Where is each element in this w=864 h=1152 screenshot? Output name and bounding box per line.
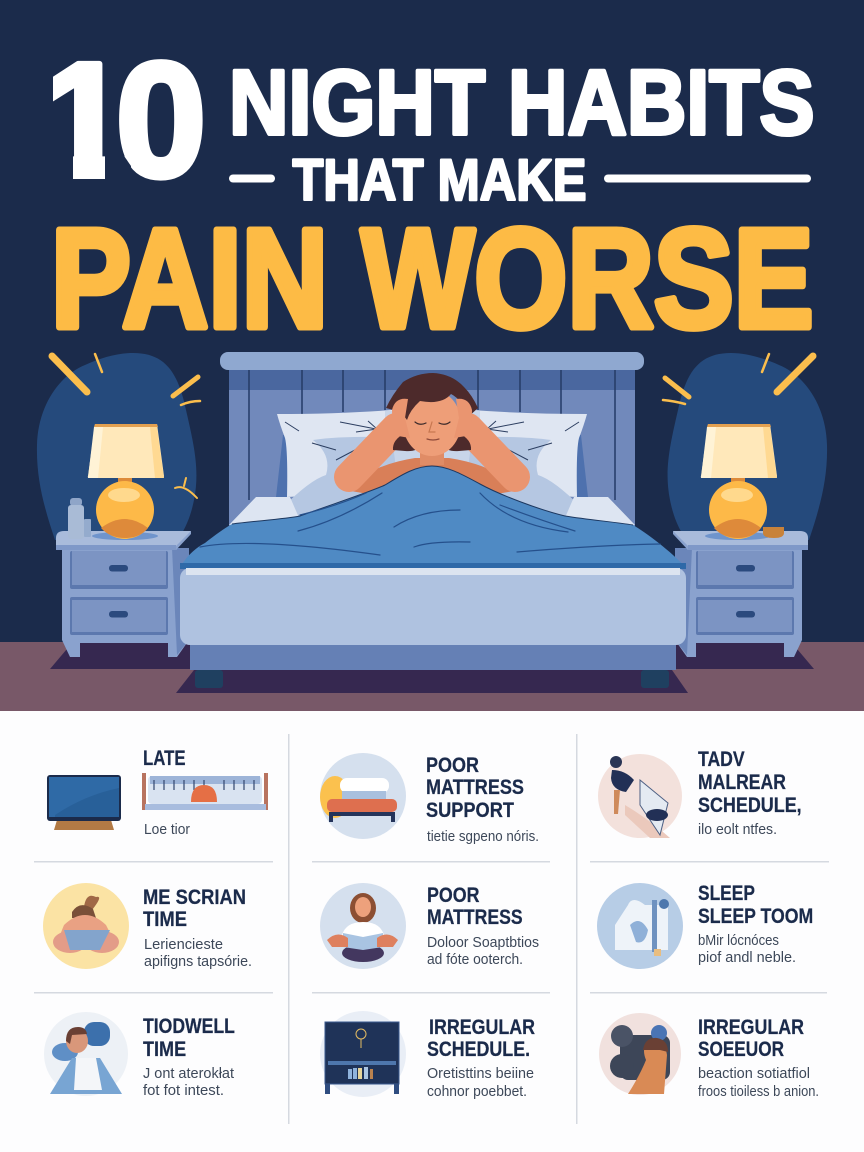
description: ilo eolt ntfes.	[698, 822, 777, 838]
description: froos tioiless b anion.	[698, 1084, 819, 1100]
description: Oretisttins beiine	[427, 1066, 534, 1082]
right nightstand	[673, 531, 808, 657]
woman holding her head	[345, 373, 520, 505]
description: piof andl neble.	[698, 950, 796, 966]
description: apifigns tapsórie.	[144, 954, 252, 970]
icon: navy board with shelf	[320, 1011, 406, 1097]
hair	[386, 373, 478, 420]
item 7: tiodwell time	[44, 1012, 235, 1099]
description: Loe tior	[144, 822, 190, 838]
floor shadow left	[50, 643, 190, 669]
column divider right	[576, 734, 578, 1124]
heading: IRREGULAR	[698, 1016, 804, 1039]
description	[427, 1066, 534, 1100]
heading: SLEEP	[698, 883, 755, 905]
item 9: irregular soeeuor	[599, 1013, 819, 1100]
heading	[427, 1016, 535, 1061]
heading: MATTRESS	[426, 776, 524, 799]
description: bMir lócnóces	[698, 933, 779, 949]
floor shadow right	[674, 643, 814, 669]
lower white panel background	[0, 711, 864, 1152]
face	[403, 390, 461, 456]
icon: person at a bed frame	[598, 754, 682, 838]
description: J ont aterokłat	[143, 1066, 234, 1082]
chest	[345, 458, 520, 505]
heading: POOR	[427, 884, 480, 907]
title line: that make: THAT MAKE	[292, 148, 587, 213]
title	[35, 28, 814, 357]
heading: ME SCRIAN	[143, 886, 246, 909]
item 1: late	[47, 747, 268, 838]
arms	[349, 428, 515, 477]
description: tietie sgpeno nóris.	[427, 829, 539, 845]
background: night wall	[0, 0, 864, 712]
hands	[392, 399, 410, 438]
description: fot fot intest.	[143, 1083, 224, 1099]
title line: that make	[229, 148, 811, 213]
right light rays	[663, 354, 813, 404]
neck	[420, 445, 444, 465]
icon: television	[47, 775, 121, 830]
heading: SCHEDULE,	[698, 794, 802, 817]
title number 10: 10	[39, 28, 206, 211]
title line: pain worse: PAIN WORSE	[51, 200, 813, 357]
heading: TIME	[143, 1038, 186, 1061]
item 5: poor mattress	[320, 883, 539, 969]
icon: person with headset	[599, 1013, 681, 1095]
description: Leriencieste	[144, 937, 223, 953]
icon: white bedroom scene	[597, 883, 683, 969]
heading	[427, 884, 523, 929]
heading	[698, 748, 802, 817]
pillows	[276, 410, 588, 516]
item 4: screen time	[43, 883, 252, 970]
description	[698, 933, 796, 966]
heading: TIME	[143, 908, 187, 931]
headboard	[220, 352, 644, 530]
description: beaction sotiatfiol	[698, 1066, 810, 1082]
mattress	[180, 568, 686, 688]
description: ad fóte ooterch.	[427, 952, 523, 968]
description	[698, 1066, 819, 1100]
heading	[426, 754, 524, 822]
bedroom illustration	[37, 352, 827, 693]
heading: POOR	[426, 754, 479, 777]
title line: night habits: NIGHT HABITS	[229, 51, 814, 154]
item 8: irregular schedule	[320, 1011, 535, 1100]
item 3: malrear schedule	[598, 748, 802, 838]
heading: MALREAR	[698, 771, 786, 794]
heading: TADV	[698, 748, 745, 771]
description: cohnor poebbet.	[427, 1084, 527, 1100]
icon: tired person with pillow	[44, 1012, 128, 1096]
description	[427, 935, 539, 968]
icon: person reading	[320, 883, 406, 969]
heading	[698, 883, 813, 928]
heading: SOEEUOR	[698, 1038, 784, 1061]
heading	[698, 1016, 804, 1061]
description: Doloor Soaptbtios	[427, 935, 539, 951]
left lamp	[88, 424, 164, 540]
heading: SCHEDULE.	[427, 1038, 530, 1061]
row dividers	[34, 861, 829, 994]
description	[143, 1066, 234, 1099]
description	[144, 937, 252, 970]
heading: IRREGULAR	[429, 1016, 535, 1039]
left lamp glow	[37, 353, 196, 540]
bed sheet	[229, 497, 635, 525]
heading: TIODWELL	[143, 1015, 235, 1038]
heading: LATE	[143, 747, 186, 771]
heading: SLEEP TOOM	[698, 905, 813, 928]
right lamp glow	[668, 353, 827, 540]
icon: crib with mattress	[142, 773, 268, 810]
heading	[143, 1015, 235, 1061]
icon: couple with blanket	[43, 883, 129, 969]
heading: SUPPORT	[426, 799, 514, 822]
floor	[0, 642, 864, 712]
column divider left	[288, 734, 290, 1124]
icon: bed in a circle	[320, 753, 406, 839]
item 6: sleep room	[597, 883, 813, 969]
heading	[143, 886, 246, 931]
right lamp	[701, 424, 777, 540]
item 2: poor mattress support	[320, 753, 539, 845]
heading: MATTRESS	[427, 906, 523, 929]
left nightstand	[56, 531, 191, 657]
left light rays	[52, 354, 200, 498]
small bowl	[763, 527, 784, 538]
blanket	[180, 466, 686, 569]
closed eyes and mouth	[415, 422, 450, 440]
floor shadow bed	[176, 670, 688, 693]
hair back	[393, 433, 471, 451]
medicine bottle	[68, 498, 91, 539]
